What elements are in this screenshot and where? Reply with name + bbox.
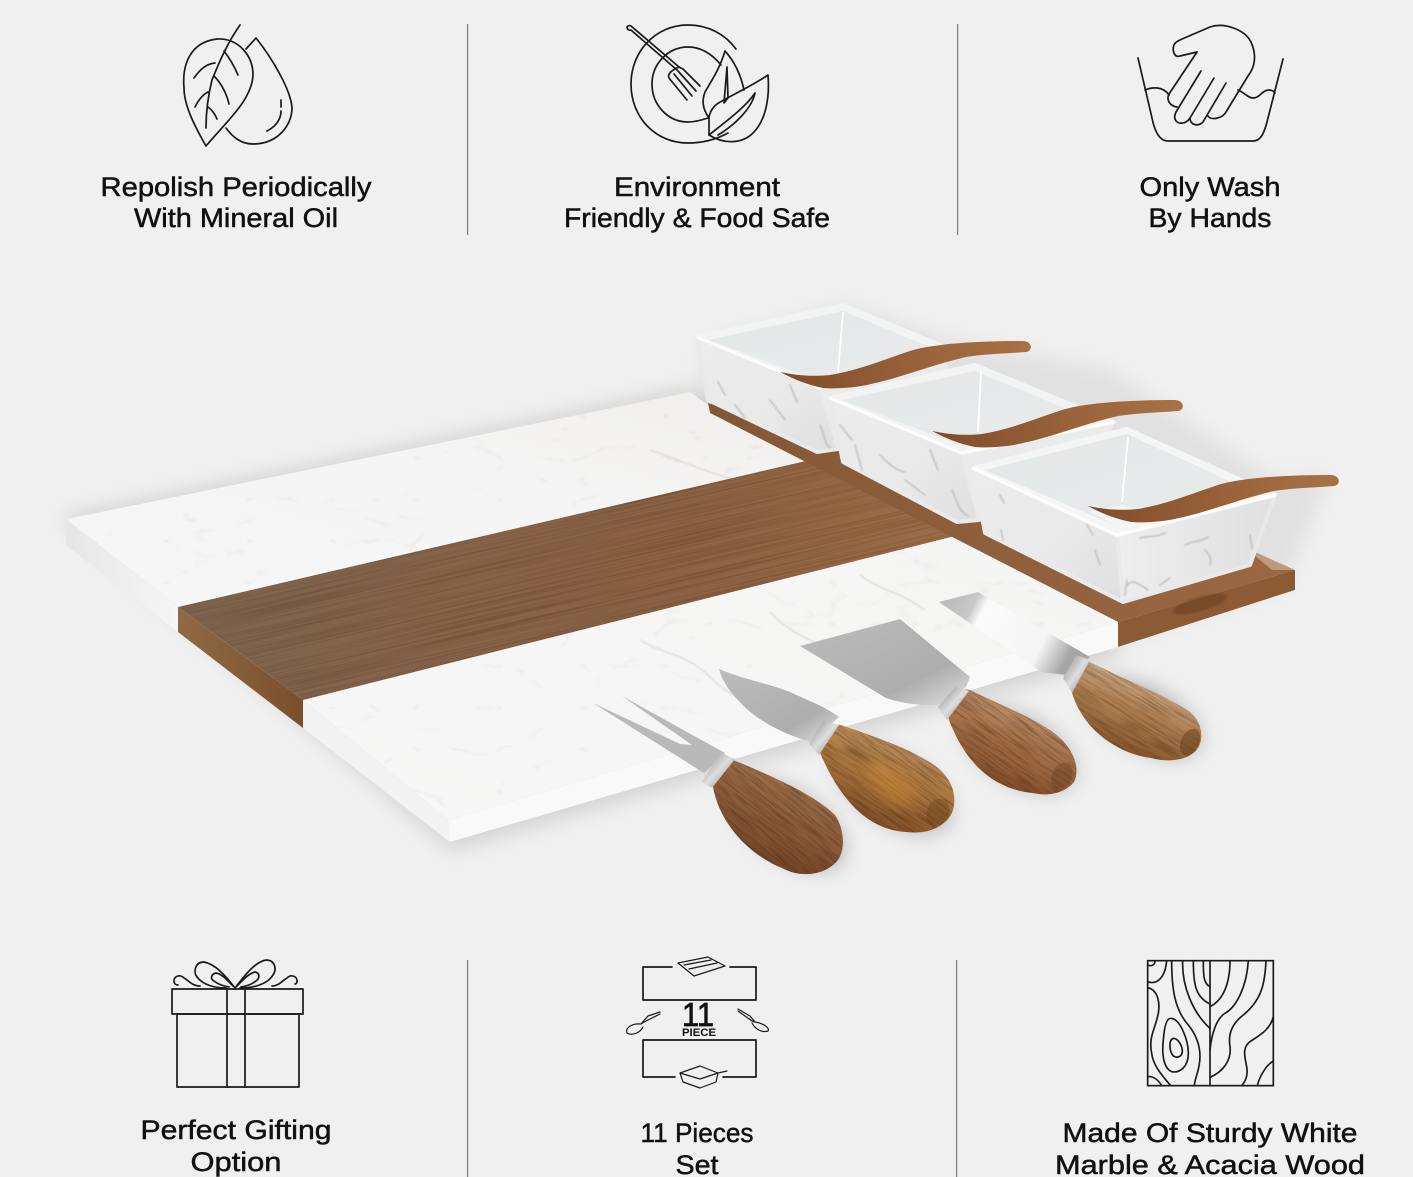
text: only wash by hands: By Hands (1148, 203, 1272, 233)
spoon 3 (1088, 475, 1339, 522)
text: made of sturdy white marble and acacia wood: Made Of Sturdy White (1062, 1118, 1358, 1148)
text: only wash by hands: Only Wash (1140, 172, 1280, 202)
text: perfect gifting option (140, 1115, 332, 1177)
icon: 11 piece set diagram: PIECE (682, 1027, 716, 1039)
shadows around product (60, 305, 1330, 850)
board side faces (66, 519, 1118, 842)
text: perfect gifting option: Option (190, 1147, 282, 1177)
icon: gift box (172, 960, 303, 1087)
panel: product features row (140, 957, 1365, 1177)
feature: 11 pieces set (627, 957, 768, 1177)
text: 11 pieces set (640, 1118, 754, 1177)
product: marble and acacia board set (60, 305, 1339, 933)
chisel cheese knife (939, 592, 1202, 760)
text: only wash by hands (1140, 172, 1280, 233)
text: perfect gifting option: Perfect Gifting (140, 1115, 332, 1145)
feature: repolish with mineral oil (100, 25, 372, 233)
feature: sturdy white marble and acacia wood (1055, 961, 1365, 1177)
board marble top section (60, 385, 820, 615)
icon: 11 piece set diagram: 11 (682, 996, 714, 1033)
cutting board (66, 392, 1118, 842)
text: made of sturdy white marble and acacia wood (1055, 1118, 1365, 1177)
knife shadows (721, 663, 1212, 887)
wooden tray (708, 403, 1295, 647)
spoon 2 (932, 400, 1183, 447)
icon: wood grain square (1148, 961, 1273, 1086)
icon: two leaves (184, 25, 292, 146)
board acacia wood strip (178, 461, 952, 700)
bowl 2 with spoon (830, 365, 1183, 522)
text: repolish periodically with mineral oil: Repolish Periodically (100, 172, 372, 202)
cheese knives (594, 592, 1208, 879)
text: environment friendly and food safe: Friendly & Food Safe (564, 203, 830, 233)
text: repolish periodically with mineral oil (100, 172, 372, 233)
feature: environment friendly and food safe (564, 25, 830, 233)
feature: perfect gifting option (140, 960, 332, 1177)
pointed knife (719, 669, 954, 832)
spatula cheese knife (800, 619, 1076, 794)
bowl 1 with spoon (697, 305, 1031, 452)
text: repolish periodically with mineral oil: With Mineral Oil (134, 203, 338, 233)
text: environment friendly and food safe (564, 172, 830, 233)
icon: plate, fork and leaves (627, 25, 768, 143)
icon: 11 piece set diagram (627, 957, 768, 1088)
bowl 3 with spoon (973, 429, 1339, 602)
text: environment friendly and food safe: Environment (614, 172, 781, 202)
icon: hand in wash basin (1138, 25, 1283, 141)
panel: care features row (100, 24, 1283, 235)
board marble bottom section (300, 530, 1120, 825)
cheese fork (594, 696, 843, 874)
feature: only wash by hands (1138, 25, 1283, 233)
text: 11 pieces set: 11 Pieces (640, 1118, 754, 1148)
spoon 1 (780, 341, 1031, 388)
